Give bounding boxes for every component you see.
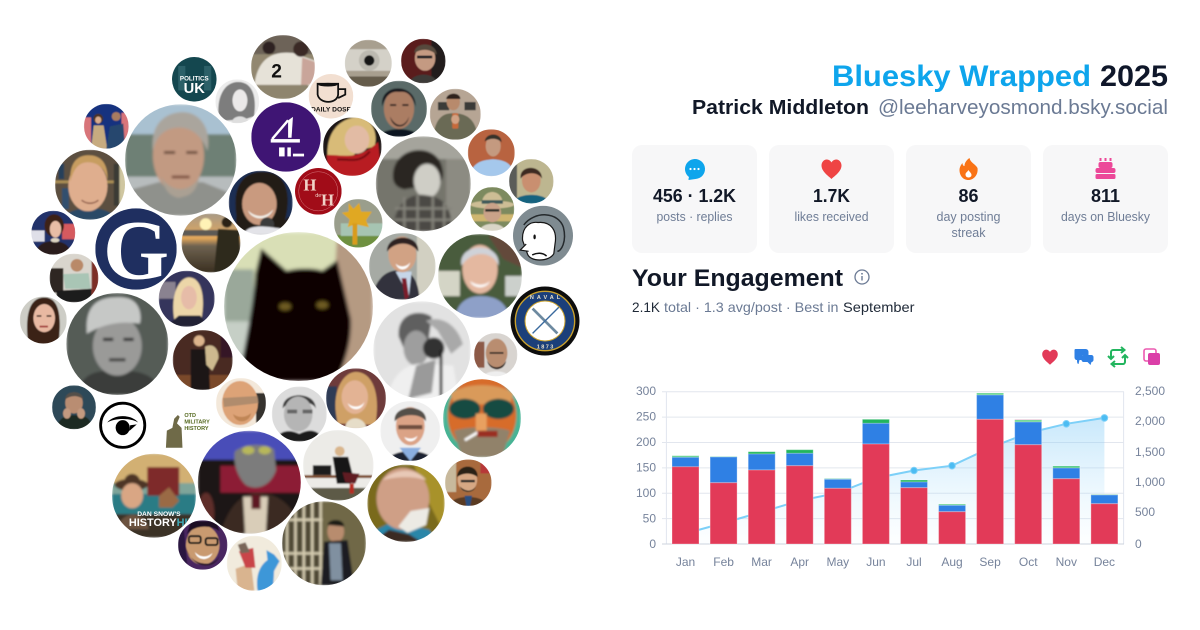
- icon: info: [855, 270, 869, 284]
- right axis labels: 1,000: [1135, 475, 1165, 489]
- cumulative markers: [911, 415, 1108, 474]
- right axis labels: 500: [1135, 505, 1155, 519]
- avatar: smiling man, purple tint: [178, 520, 227, 570]
- avatar: Hi-de-Hi logo: H: [321, 190, 334, 209]
- avatar: blonde woman: [159, 271, 215, 327]
- avatar: OTD Military History logo: HISTORY: [184, 426, 209, 432]
- icon: flame: [960, 158, 978, 180]
- avatar: US Naval Institute seal: NAVAL: [530, 295, 561, 301]
- avatar: bearded man in green sunglasses: [443, 376, 521, 457]
- avatar: woman in plaid, black and white: [376, 136, 471, 231]
- avatar: Politics UK logo: UK: [184, 81, 205, 97]
- avatar: Daily Dose logo: [309, 74, 353, 119]
- avatar: man in floral shirt: [50, 254, 98, 302]
- month labels: Feb: [713, 555, 734, 569]
- avatar: woman with flag: [31, 211, 75, 255]
- cumulative area fill: [686, 418, 1104, 544]
- engagement summary: September: [843, 299, 915, 315]
- user name and handle: [692, 97, 1168, 119]
- avatar: Hi-de-Hi logo: de: [315, 193, 321, 199]
- panel: posts and replies: [632, 145, 757, 253]
- left axis labels: 0: [649, 537, 656, 551]
- avatar: smiling older man, plaid shirt: [438, 234, 522, 318]
- stat label: days on Bluesky: [1061, 209, 1150, 224]
- panel: days on Bluesky: [1043, 145, 1168, 253]
- right axis labels: 0: [1135, 537, 1142, 551]
- icon: likes heart: [1042, 350, 1058, 365]
- avatar: smiling man before bookshelf: [55, 150, 126, 220]
- avatar: bald man with glasses: [216, 378, 266, 428]
- month labels: Mar: [751, 555, 772, 569]
- bar: Aug: [939, 504, 966, 544]
- avatar: blue cartoon animal: [227, 536, 282, 591]
- avatar: yellow mascot on field: [334, 199, 383, 248]
- bar: May: [824, 478, 851, 544]
- icon: quotes squares: [1144, 349, 1160, 365]
- month labels: May: [826, 555, 849, 569]
- panel: day posting streak: [906, 145, 1031, 253]
- right axis labels: 2,000: [1135, 414, 1165, 428]
- avatar: Politics UK logo: POLITICS: [180, 76, 209, 83]
- bar: Nov: [1053, 466, 1080, 544]
- stat label: [936, 209, 1000, 240]
- icon: reposts arrows: [1108, 347, 1128, 367]
- avatar: man in straw hat: [470, 187, 514, 231]
- avatar: Hi-de-Hi logo: [295, 168, 342, 215]
- avatar: man with glasses and tie: [380, 401, 440, 461]
- engagement summary: 2.1K: [632, 299, 661, 315]
- left axis labels: 300: [636, 384, 656, 398]
- bar: Jun: [862, 419, 889, 544]
- engagement combo chart: [636, 384, 1165, 569]
- avatar: OTD Military History logo: MILITARY: [184, 419, 210, 425]
- avatar: man before books: [445, 459, 492, 506]
- month labels: Jul: [906, 555, 922, 569]
- avatar: Politics UK logo: [172, 57, 217, 102]
- stat label: day posting: [936, 209, 1000, 224]
- stat value: 456 · 1.2K: [653, 186, 736, 206]
- left axis labels: 150: [636, 460, 656, 474]
- icon: heart: [822, 160, 842, 179]
- bar: Mar: [748, 452, 775, 544]
- avatar: US Naval Institute seal: 1873: [537, 345, 553, 351]
- icon: birthday cake: [1096, 158, 1116, 179]
- bar: Jan: [672, 456, 699, 544]
- bar: Dec: [1091, 494, 1118, 544]
- icon: chat bubble: [685, 159, 705, 180]
- avatar: woman with long dark hair: [20, 296, 67, 344]
- avatar: dark-haired man portrait: [371, 81, 427, 137]
- avatar: Channel 4 logo: [251, 102, 321, 172]
- right axis labels: 1,500: [1135, 445, 1165, 459]
- avatar cluster: [20, 35, 580, 591]
- avatar: man in glasses: [401, 39, 446, 83]
- avatar: man in blue top: [509, 159, 554, 204]
- right axis labels: 2,500: [1135, 384, 1165, 398]
- avatar: couple with US flag: [84, 104, 129, 149]
- icon: replies bubbles: [1074, 349, 1094, 365]
- stat label: streak: [952, 225, 986, 240]
- panel: likes received: [769, 145, 894, 253]
- bar: Apr: [786, 450, 813, 544]
- avatar: vintage camera: [345, 40, 392, 87]
- avatar: rugby player number 2: [251, 35, 315, 99]
- avatar: woman on bench: [303, 430, 374, 501]
- avatar: bald man with beard: [474, 333, 517, 376]
- avatar: cartoon character: [513, 206, 573, 266]
- avatar: mirror selfie man: [430, 89, 481, 140]
- avatar: woman in red scarf: [323, 117, 382, 176]
- avatar: older man in cap, greyscale: [66, 293, 168, 395]
- left axis labels: 50: [643, 512, 656, 526]
- stat value: 86: [958, 186, 978, 206]
- avatar: blonde woman smiling: [326, 368, 386, 428]
- month labels: Dec: [1094, 555, 1115, 569]
- avatar: man hands on chin: [52, 385, 96, 429]
- right axis labels: [1135, 384, 1165, 551]
- stat value: 811: [1091, 186, 1120, 206]
- avatar: Hi-de-Hi logo: H: [303, 175, 316, 194]
- month labels: Apr: [790, 555, 809, 569]
- avatar: Dan Snow's History Hit: HISTORYHIT: [129, 517, 195, 529]
- avatar: black cat: [224, 232, 373, 381]
- avatar: muppet in suit: [198, 431, 303, 534]
- month labels: [676, 555, 1115, 569]
- avatar: rugby player number 2: 2: [271, 61, 282, 82]
- avatar: OTD Military History logo: [166, 413, 210, 448]
- bar: Jul: [900, 480, 928, 544]
- avatar: older man, black and white: [272, 386, 327, 442]
- avatar: man before brick wall: [468, 129, 515, 176]
- month labels: Aug: [941, 555, 963, 569]
- avatar: man taking a photo: [373, 301, 471, 399]
- month labels: Nov: [1056, 555, 1077, 569]
- avatar: Daily Dose logo: DAILY DOSE: [311, 106, 352, 113]
- title: Bluesky Wrapped: [832, 60, 1091, 93]
- month labels: Jun: [866, 555, 886, 569]
- month labels: Sep: [979, 555, 1001, 569]
- stat label: posts · replies: [656, 209, 733, 224]
- month labels: Oct: [1019, 555, 1038, 569]
- month labels: Jan: [676, 555, 695, 569]
- bar: Sep: [977, 393, 1004, 544]
- engagement summary: total · 1.3 avg/post · Best in: [664, 299, 838, 315]
- cumulative line: [686, 418, 1104, 534]
- avatar: grey-haired man by window: [125, 104, 236, 216]
- chart legend: [1042, 347, 1160, 367]
- avatar: eye logo: [101, 403, 145, 447]
- engagement summary: [632, 299, 915, 315]
- stacked bars: [672, 393, 1118, 544]
- stat value: 1.7K: [813, 186, 850, 206]
- left axis labels: 100: [636, 486, 656, 500]
- bar: Feb: [710, 456, 737, 544]
- avatar: sketch of woman: [215, 79, 259, 123]
- user name and handle: Patrick Middleton: [692, 97, 869, 119]
- avatar: Dan Snow's History Hit: [112, 454, 196, 538]
- heading: Your Engagement: Your Engagement: [632, 265, 843, 292]
- avatar: smiling man in suit: [369, 233, 436, 300]
- avatar: Dan Snow's History Hit: DAN SNOW'S: [137, 511, 181, 518]
- stat label: likes received: [794, 209, 868, 224]
- avatar: The Guardian logo: G: [103, 204, 169, 297]
- avatar: bald man with white goatee: [367, 465, 445, 542]
- title: 2025: [1100, 60, 1168, 93]
- avatar: US Naval Institute seal: [510, 286, 580, 356]
- left axis labels: 200: [636, 435, 656, 449]
- left axis labels: 250: [636, 410, 656, 424]
- avatar: sunset silhouette: [182, 214, 240, 272]
- avatar: OTD Military History logo: OTD: [184, 413, 196, 419]
- avatar: woman holding dog: [173, 330, 233, 390]
- bar: Oct: [1015, 419, 1042, 544]
- avatar: smiling man with microphone: [229, 171, 293, 235]
- avatar: man behind prison bars: [282, 501, 366, 585]
- user name and handle: @leeharveyosmond.bsky.social: [878, 97, 1168, 119]
- left axis labels: [636, 384, 656, 551]
